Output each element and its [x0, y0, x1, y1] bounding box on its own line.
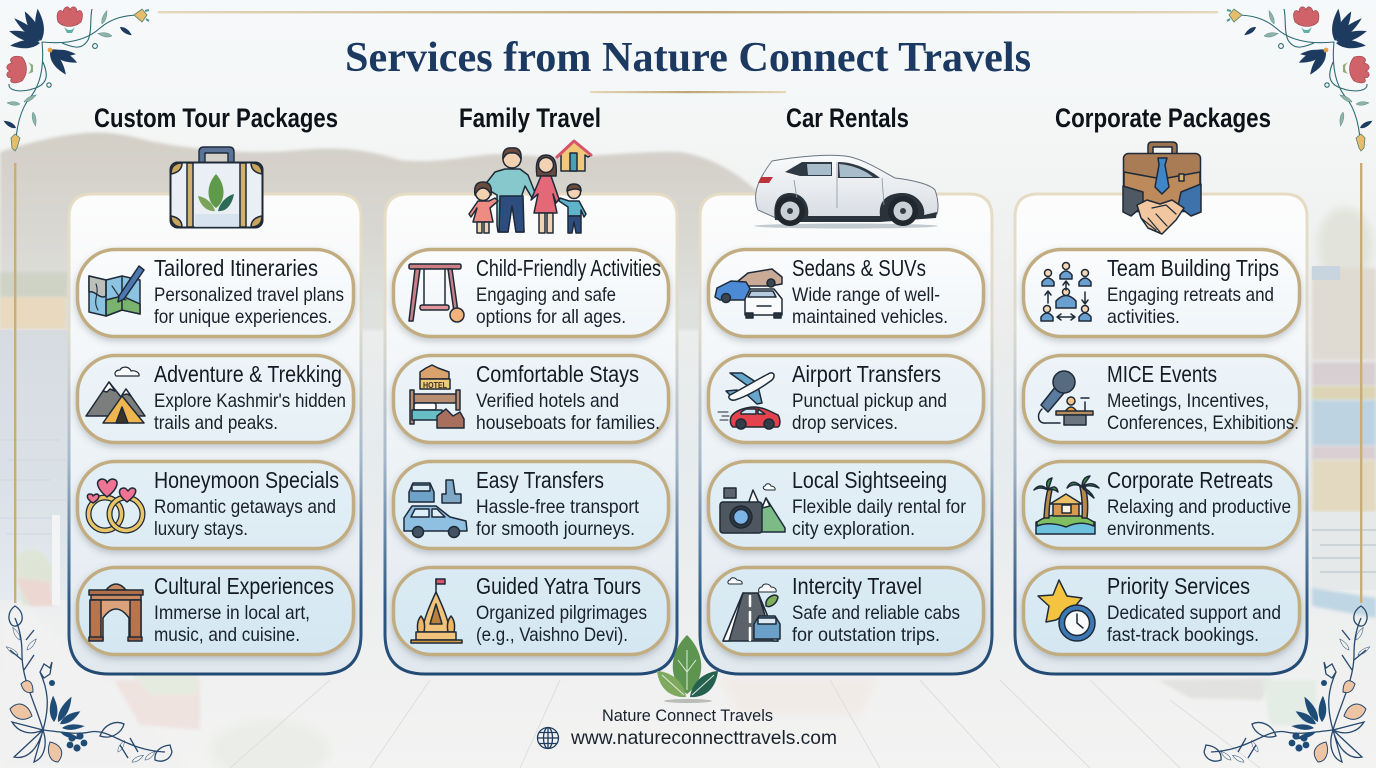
- text: Child-Friendly Activities: options for all ages.: [476, 306, 626, 328]
- text: Adventure & Trekking: Adventure & Trekking: [154, 361, 342, 387]
- text: Team Building Trips: Team Building Trips: [1107, 255, 1279, 281]
- website: www.natureconnecttravels.com: [570, 727, 837, 749]
- text: Child-Friendly Activities: Child-Friendly Activities: [476, 255, 661, 281]
- text: Guided Yatra Tours: (e.g., Vaishno Devi).: [476, 624, 628, 646]
- text: Priority Services: Dedicated support and: [1107, 602, 1281, 624]
- text: Easy Transfers: [476, 467, 640, 540]
- pill: Comfortable Stays: [394, 356, 668, 442]
- text: Cultural Experiences: music, and cuisine.: [154, 624, 300, 646]
- text: Easy Transfers: Easy Transfers: [476, 467, 604, 493]
- text: Corporate Retreats: Relaxing and productive: [1107, 496, 1291, 518]
- pill: MICE Events: [1024, 356, 1300, 442]
- text: Honeymoon Specials: Honeymoon Specials: [154, 467, 339, 493]
- text: Corporate Retreats: [1107, 467, 1291, 540]
- icon: suitcase with leaf: [170, 147, 262, 228]
- text: Airport Transfers: Airport Transfers: [792, 361, 941, 387]
- text: Local Sightseeing: [792, 467, 966, 540]
- pill: Honeymoon Specials: [78, 462, 354, 548]
- text: Cultural Experiences: Immerse in local art,: [154, 602, 310, 624]
- text: Guided Yatra Tours: Guided Yatra Tours: [476, 573, 641, 599]
- text: MICE Events: Conferences, Exhibitions.: [1107, 412, 1299, 434]
- pill: Sedans & SUVs: [708, 250, 984, 336]
- title: Services from Nature Connect Travels: [345, 35, 1031, 81]
- heading: Family Travel: Family Travel: [459, 103, 601, 133]
- corner floral: top right: [1227, 7, 1374, 151]
- text: Local Sightseeing: Flexible daily rental for: [792, 496, 966, 518]
- corner floral: bottom right: [1204, 606, 1371, 764]
- text: Airport Transfers: drop services.: [792, 412, 898, 434]
- icon: camera and mountains: [720, 484, 785, 533]
- panel: Corporate Packages: [1015, 103, 1307, 674]
- icon: star and clock: [1038, 580, 1095, 641]
- text: Tailored Itineraries: for unique experiences.: [154, 306, 332, 328]
- pill: Local Sightseeing: [708, 462, 984, 548]
- text: Honeymoon Specials: luxury stays.: [154, 518, 248, 540]
- icon: white SUV: [754, 155, 938, 228]
- icon: three cars: [715, 269, 782, 318]
- logo: green leaves: [657, 635, 718, 703]
- panel: Custom Tour Packages: [69, 103, 361, 674]
- text: Corporate Retreats: environments.: [1107, 518, 1215, 540]
- text: Adventure & Trekking: trails and peaks.: [154, 412, 278, 434]
- text: Honeymoon Specials: Romantic getaways and: [154, 496, 336, 518]
- corner floral: bottom left: [5, 606, 172, 764]
- text: Child-Friendly Activities: Engaging and safe: [476, 284, 616, 306]
- pill: Team Building Trips: [1024, 250, 1300, 336]
- brand name: Nature Connect Travels: [602, 706, 773, 725]
- text: MICE Events: MICE Events: [1107, 361, 1217, 387]
- text: Sedans & SUVs: maintained vehicles.: [792, 306, 948, 328]
- text: Priority Services: [1107, 573, 1281, 646]
- text: Local Sightseeing: Local Sightseeing: [792, 467, 947, 493]
- icon: heritage gate: [89, 584, 143, 641]
- icon: team network: [1041, 262, 1091, 321]
- heading: Custom Tour Packages: Custom Tour Packages: [94, 103, 338, 133]
- text: Airport Transfers: Punctual pickup and: [792, 390, 947, 412]
- text: Easy Transfers: for smooth journeys.: [476, 518, 635, 540]
- text: Airport Transfers: [792, 361, 947, 434]
- text: Intercity Travel: for outstation trips.: [792, 624, 940, 646]
- heading: Corporate Packages: Corporate Packages: [1055, 103, 1271, 133]
- text: Intercity Travel: Safe and reliable cabs: [792, 602, 960, 624]
- text: Tailored Itineraries: Personalized travel plans: [154, 284, 344, 306]
- text: Cultural Experiences: [154, 573, 334, 646]
- text: Team Building Trips: activities.: [1107, 306, 1180, 328]
- icon: hotel and bed: HOTEL: [423, 381, 447, 390]
- icon: rings and hearts: [87, 479, 142, 530]
- icon: hotel and bed: [410, 365, 464, 428]
- icon: temple: [411, 579, 462, 643]
- corner floral: top left: [2, 7, 149, 151]
- icon: road and car: [723, 578, 780, 641]
- panel: Car Rentals: [700, 103, 992, 674]
- title underline: [590, 91, 786, 93]
- pill: Priority Services: [1024, 568, 1300, 654]
- text: Intercity Travel: [792, 573, 960, 646]
- text: Easy Transfers: Hassle-free transport: [476, 496, 640, 518]
- pill: Easy Transfers: [394, 462, 668, 548]
- text: Team Building Trips: [1107, 255, 1279, 328]
- icon: globe: [538, 728, 558, 748]
- icon: briefcase and handshake: [1123, 142, 1201, 234]
- text: Child-Friendly Activities: [476, 255, 661, 328]
- text: Team Building Trips: Engaging retreats and: [1107, 284, 1274, 306]
- text: Guided Yatra Tours: [476, 573, 647, 646]
- text: Comfortable Stays: [476, 361, 660, 434]
- text: Guided Yatra Tours: Organized pilgrimages: [476, 602, 647, 624]
- text: Sedans & SUVs: [792, 255, 948, 328]
- heading: Car Rentals: Car Rentals: [786, 103, 909, 133]
- pill: Corporate Retreats: [1024, 462, 1300, 548]
- icon: car, seat and van: [404, 480, 467, 538]
- text: Tailored Itineraries: Tailored Itineraries: [154, 255, 318, 281]
- pill: Child-Friendly Activities: [394, 250, 668, 336]
- pill: Tailored Itineraries: [78, 250, 354, 336]
- pill: Intercity Travel: [708, 568, 984, 654]
- pill: Adventure & Trekking: [78, 356, 354, 442]
- pill: Airport Transfers: [708, 356, 984, 442]
- panel: Family Travel: [385, 103, 677, 674]
- text: Priority Services: Priority Services: [1107, 573, 1250, 599]
- icon: plane and red car: [718, 373, 780, 429]
- text: MICE Events: [1107, 361, 1299, 434]
- text: Tailored Itineraries: [154, 255, 344, 328]
- text: Priority Services: fast-track bookings.: [1107, 624, 1259, 646]
- decorative right gold line: [1360, 163, 1362, 603]
- text: Cultural Experiences: Cultural Experiences: [154, 573, 334, 599]
- pill: Cultural Experiences: [78, 568, 354, 654]
- text: Adventure & Trekking: [154, 361, 346, 434]
- text: Comfortable Stays: houseboats for families.: [476, 412, 660, 434]
- pill: Guided Yatra Tours: [394, 568, 668, 654]
- text: MICE Events: Meetings, Incentives,: [1107, 390, 1269, 412]
- text: Honeymoon Specials: [154, 467, 339, 540]
- icon: microphone and podium: [1039, 371, 1093, 425]
- text: Sedans & SUVs: Sedans & SUVs: [792, 255, 926, 281]
- text: Comfortable Stays: Verified hotels and: [476, 390, 619, 412]
- icon: family and house: [469, 141, 591, 233]
- text: Intercity Travel: Intercity Travel: [792, 573, 922, 599]
- text: Comfortable Stays: Comfortable Stays: [476, 361, 639, 387]
- icon: swing: [409, 264, 464, 322]
- text: Sedans & SUVs: Wide range of well-: [792, 284, 940, 306]
- icon: palm island retreat: [1034, 476, 1099, 534]
- icon: mountains and tent: [86, 367, 145, 423]
- text: Corporate Retreats: Corporate Retreats: [1107, 467, 1273, 493]
- decorative top gold rule: [158, 11, 1218, 13]
- text: Adventure & Trekking: Explore Kashmir's hidden: [154, 390, 346, 412]
- text: Local Sightseeing: city exploration.: [792, 518, 915, 540]
- decorative left gold line: [14, 163, 16, 603]
- icon: map and pen: [89, 266, 144, 316]
